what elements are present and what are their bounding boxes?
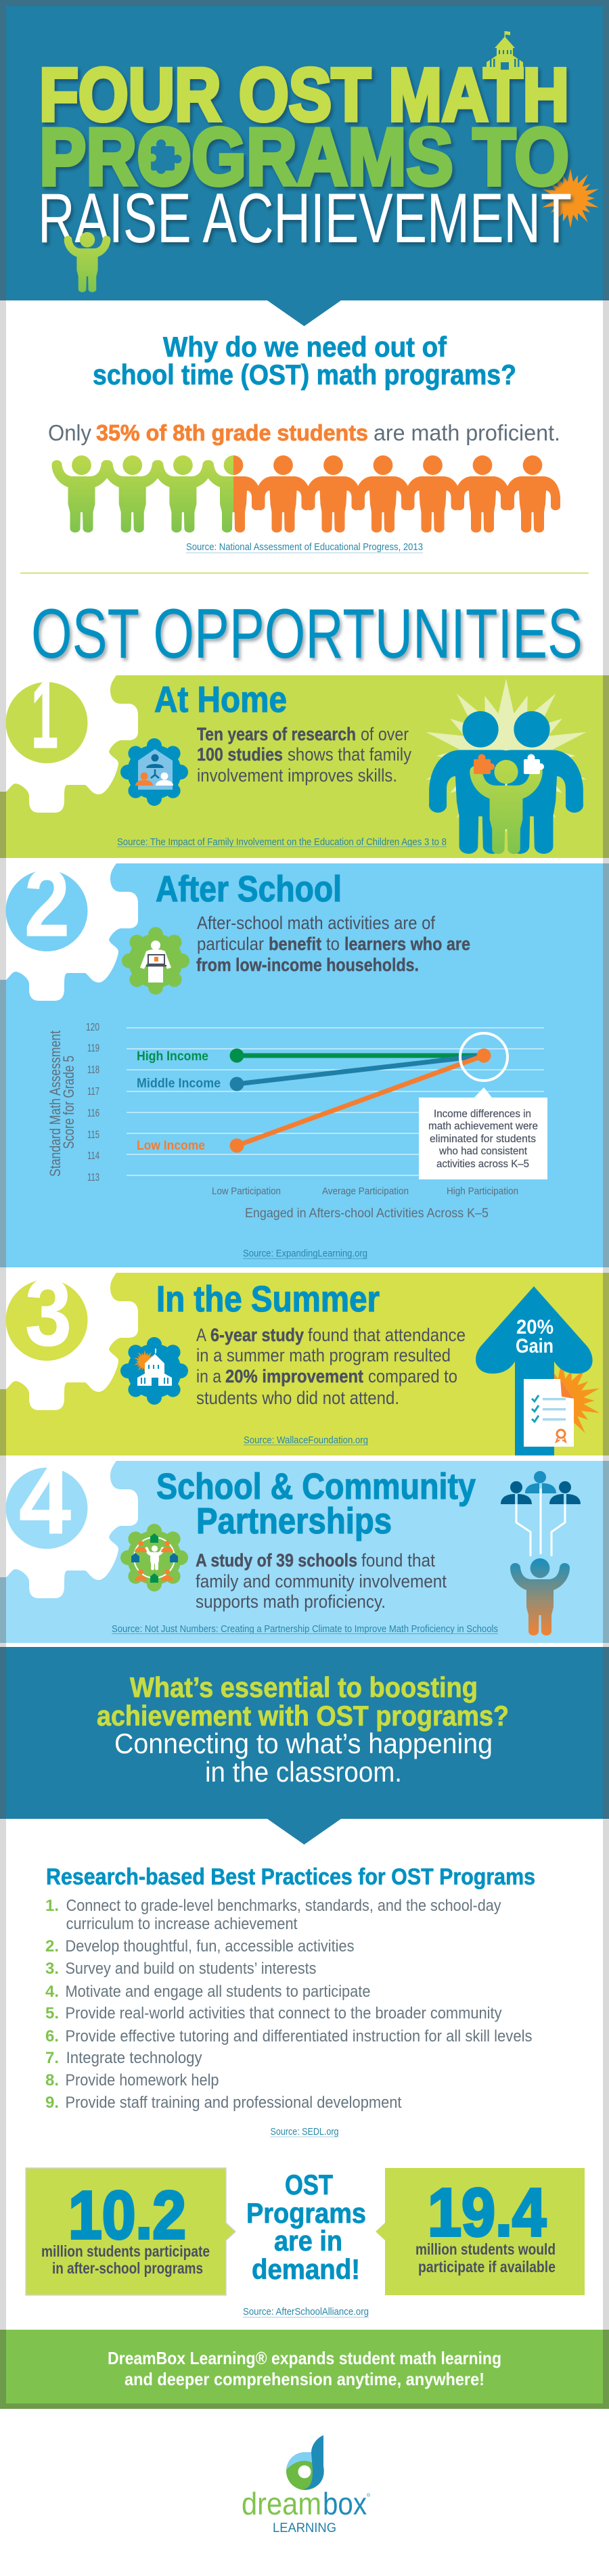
numbered list: Provide staff training and professional development bbox=[65, 2094, 402, 2112]
banner: dreambox message bbox=[0, 2330, 609, 2409]
wordmark: dream bbox=[242, 2486, 321, 2521]
header panel bbox=[0, 0, 609, 300]
answer: Connecting to what’s happening bbox=[114, 1727, 493, 1759]
numbered list: 4. bbox=[45, 1983, 59, 2001]
statement: 35% proficient: Only bbox=[48, 420, 91, 445]
numbered list: 2. bbox=[45, 1937, 59, 1956]
body text: 100 studies bbox=[197, 744, 283, 765]
illustration: family with puzzle pieces bbox=[423, 679, 589, 854]
icon: cheering figure bbox=[64, 232, 110, 292]
numbered list bbox=[45, 1897, 532, 2112]
panel: at home bbox=[0, 661, 609, 858]
source: Source: The Impact of Family Involvement on the Education of Children Ages 3 to 8 bbox=[117, 836, 447, 848]
series labels: Middle Income bbox=[137, 1077, 221, 1091]
icon: schoolhouse bbox=[487, 31, 523, 70]
gear with number 2 bbox=[0, 849, 138, 1001]
statement: 35% proficient: 35% of 8th grade students bbox=[96, 420, 368, 445]
pointer bbox=[267, 1819, 341, 1845]
body text: shows that family bbox=[288, 744, 411, 765]
panel: in the summer bbox=[0, 1259, 609, 1455]
question: achievement with OST programs? bbox=[97, 1700, 509, 1732]
gear with number 4: 4 bbox=[19, 1447, 71, 1554]
x axis labels: Low Participation bbox=[212, 1185, 281, 1197]
source: Source: AfterSchoolAlliance.org bbox=[243, 2306, 369, 2318]
body text bbox=[196, 1325, 466, 1408]
series lines bbox=[230, 1049, 491, 1153]
20% gain label: 20% bbox=[516, 1316, 554, 1338]
wordmark: box bbox=[323, 2486, 367, 2521]
body text: learners who are bbox=[344, 934, 470, 954]
x axis labels: High Participation bbox=[447, 1185, 518, 1197]
pictogram: ten students bbox=[51, 455, 560, 533]
heading: why OST: Why do we need out of bbox=[163, 331, 447, 363]
logo mark bbox=[286, 2435, 324, 2490]
20% gain label: Gain bbox=[516, 1335, 554, 1357]
question bbox=[97, 1671, 509, 1732]
panel: what's essential bbox=[0, 1647, 609, 1819]
y axis title bbox=[47, 1031, 77, 1177]
gear with number 2: 2 bbox=[24, 849, 70, 956]
center message bbox=[246, 2169, 366, 2285]
x axis labels: Average Participation bbox=[322, 1185, 409, 1197]
heading: best practices: Research-based Best Practices for OST Programs bbox=[46, 1864, 535, 1890]
line chart bbox=[47, 1022, 547, 1221]
body text: students who did not attend. bbox=[196, 1388, 399, 1408]
y axis ticks: 113 bbox=[87, 1172, 99, 1183]
wordmark: ® bbox=[367, 2493, 371, 2498]
body text: benefit bbox=[269, 934, 321, 954]
body text: After-school math activities are of bbox=[197, 913, 435, 933]
numbered list: Survey and build on students’ interests bbox=[65, 1960, 317, 1978]
statement: 35% proficient bbox=[48, 420, 560, 445]
answer: in the classroom. bbox=[205, 1756, 402, 1788]
source: Source: SEDL.org bbox=[271, 2126, 338, 2138]
body text: family and community involvement bbox=[196, 1571, 447, 1591]
stat box: 10.2 million: in after-school programs bbox=[52, 2259, 203, 2277]
tagline: LEARNING bbox=[273, 2521, 336, 2535]
wordmark bbox=[242, 2486, 371, 2521]
numbered list: curriculum to increase achievement bbox=[66, 1915, 298, 1933]
source: Source: WallaceFoundation.org bbox=[244, 1434, 368, 1446]
body text: from low-income households. bbox=[196, 955, 419, 975]
callout bbox=[419, 1087, 547, 1179]
stat box: 10.2 million: 10.2 bbox=[68, 2177, 186, 2253]
body text: in a bbox=[196, 1366, 222, 1386]
body text: involvement improves skills. bbox=[197, 765, 397, 786]
panel: after school bbox=[0, 849, 609, 1267]
y axis title: Standard Math Assessment bbox=[47, 1031, 64, 1177]
numbered list: 3. bbox=[45, 1960, 59, 1978]
numbered list: Develop thoughtful, fun, accessible activities bbox=[65, 1937, 355, 1956]
stat box: 10.2 million bbox=[26, 2168, 235, 2295]
series labels: Low Income bbox=[137, 1139, 205, 1153]
callout: Income differences in bbox=[434, 1108, 531, 1120]
body text: Ten years of research bbox=[197, 724, 356, 744]
series labels bbox=[137, 1049, 221, 1153]
body text: supports math proficiency. bbox=[196, 1591, 386, 1612]
body text: of over bbox=[361, 724, 409, 744]
numbered list: Integrate technology bbox=[66, 2049, 202, 2067]
y axis title: Score for Grade 5 bbox=[60, 1056, 77, 1149]
y axis ticks: 118 bbox=[87, 1064, 99, 1076]
numbered list: 8. bbox=[45, 2071, 59, 2089]
heading: After School bbox=[156, 869, 342, 909]
body text: found that bbox=[361, 1550, 435, 1571]
stat box: 19.4 million: million students would bbox=[415, 2240, 556, 2258]
stat box: 10.2 million: million students participate bbox=[41, 2242, 210, 2260]
heading: why OST bbox=[93, 331, 516, 390]
orange students bbox=[206, 455, 560, 533]
numbered list: Provide homework help bbox=[65, 2071, 219, 2089]
green students raised arms bbox=[51, 455, 233, 533]
20% gain label bbox=[516, 1316, 554, 1357]
center message: Programs bbox=[246, 2197, 366, 2229]
center message: OST bbox=[285, 2169, 333, 2200]
numbered list: Connect to grade-level benchmarks, standards, and the school-day bbox=[66, 1897, 501, 1915]
banner: dreambox message: and deeper comprehension anytime, anywhere! bbox=[125, 2369, 484, 2389]
numbered list: 6. bbox=[45, 2027, 59, 2046]
icon: puzzle piece in O bbox=[145, 135, 181, 178]
stat box: 19.4 million: 19.4 bbox=[428, 2175, 546, 2251]
callout: eliminated for students bbox=[430, 1133, 536, 1145]
body text: found that attendance bbox=[308, 1325, 466, 1345]
body text bbox=[196, 1550, 447, 1612]
illustration: arrow with certificate bbox=[476, 1286, 601, 1455]
center message: are in bbox=[274, 2225, 342, 2257]
logo: dreambox learning bbox=[242, 2435, 371, 2535]
heading bbox=[156, 1466, 476, 1541]
x axis labels bbox=[212, 1185, 518, 1197]
y axis ticks: 114 bbox=[87, 1150, 99, 1162]
statement: 35% proficient: are math proficient. bbox=[374, 420, 560, 445]
gear with number 1 bbox=[0, 661, 138, 813]
x axis title: Engaged in Afters-chool Activities Across K–5 bbox=[245, 1206, 489, 1221]
source: Source: Not Just Numbers: Creating a Partnership Climate to Improve Math Proficiency in Schools bbox=[112, 1623, 498, 1635]
numbered list: Provide effective tutoring and differentiated instruction for all skill levels bbox=[65, 2027, 532, 2046]
stat box: 19.4 million bbox=[376, 2168, 585, 2295]
answer bbox=[114, 1727, 493, 1788]
body text bbox=[197, 724, 411, 786]
source: Source: ExpandingLearning.org bbox=[243, 1248, 367, 1259]
icon: community circle in gear bbox=[120, 1524, 188, 1591]
center message: demand! bbox=[252, 2253, 360, 2285]
source: NAEP: Source: National Assessment of Educational Progress, 2013 bbox=[186, 541, 423, 553]
icon: family in home gear bbox=[120, 738, 188, 806]
body text: A study of 39 schools bbox=[196, 1550, 357, 1571]
body text: compared to bbox=[368, 1366, 457, 1386]
numbered list: 1. bbox=[45, 1897, 59, 1915]
y axis ticks: 115 bbox=[87, 1129, 99, 1141]
icon: sunburst bbox=[541, 168, 600, 228]
header pointer bbox=[267, 300, 341, 326]
numbered list: 9. bbox=[45, 2094, 59, 2112]
body text: A bbox=[196, 1325, 206, 1345]
gear with number 4 bbox=[0, 1447, 138, 1598]
illustration: community supports student bbox=[501, 1471, 581, 1635]
banner: dreambox message: DreamBox Learning® expands student math learning bbox=[108, 2348, 501, 2368]
body text: in a summer math program resulted bbox=[196, 1345, 451, 1365]
stat box: 19.4 million: participate if available bbox=[418, 2258, 556, 2276]
y axis ticks: 117 bbox=[87, 1086, 99, 1098]
certificate bbox=[524, 1379, 574, 1447]
callout: who had consistent bbox=[438, 1146, 528, 1157]
y axis ticks bbox=[86, 1022, 99, 1183]
body text: 20% improvement bbox=[225, 1366, 363, 1386]
heading: Partnerships bbox=[196, 1501, 392, 1541]
heading: In the Summer bbox=[156, 1279, 380, 1319]
icon: school in gear bbox=[120, 1337, 188, 1405]
numbered list: 5. bbox=[45, 2004, 59, 2023]
body text bbox=[196, 913, 470, 975]
icon: student with laptop in gear bbox=[122, 927, 189, 995]
gear with number 3 bbox=[0, 1259, 138, 1410]
heading: why OST: school time (OST) math programs? bbox=[93, 359, 516, 390]
numbered list: Provide real-world activities that connect to the broader community bbox=[65, 2004, 502, 2023]
y axis ticks: 120 bbox=[86, 1022, 99, 1033]
heading: At Home bbox=[154, 679, 287, 720]
y axis ticks: 116 bbox=[87, 1108, 99, 1119]
series labels: High Income bbox=[137, 1049, 208, 1064]
panel: school and community bbox=[0, 1447, 609, 1643]
body text: to bbox=[326, 934, 340, 954]
gear with number 3: 3 bbox=[25, 1259, 72, 1365]
highlight circle bbox=[460, 1033, 508, 1081]
y axis ticks: 119 bbox=[87, 1043, 99, 1054]
heading: School & Community bbox=[156, 1466, 476, 1507]
gear with number 1: 1 bbox=[31, 661, 58, 768]
numbered list: Motivate and engage all students to participate bbox=[65, 1983, 371, 2001]
numbered list: 7. bbox=[45, 2049, 59, 2067]
callout: math achievement were bbox=[428, 1121, 538, 1132]
body text: particular bbox=[197, 934, 264, 954]
callout: activities across K–5 bbox=[436, 1158, 529, 1170]
question: What’s essential to boosting bbox=[130, 1671, 478, 1703]
body text: 6-year study bbox=[210, 1325, 304, 1345]
